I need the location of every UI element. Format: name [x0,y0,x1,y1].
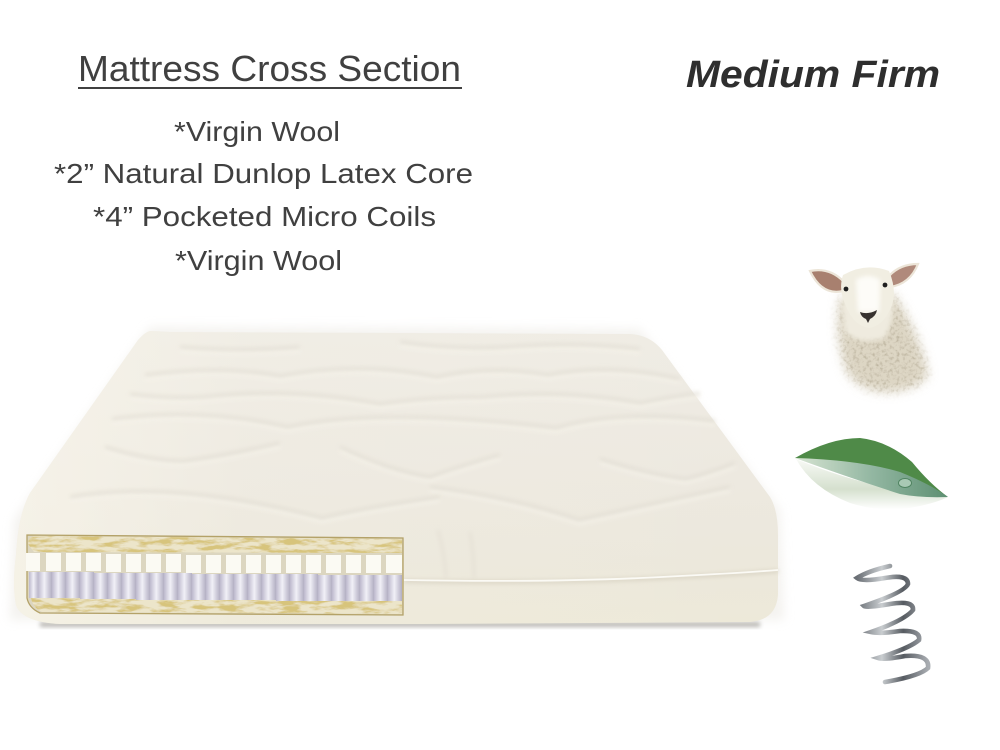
pocketed coils [29,572,402,601]
leaf underside [796,459,948,509]
leaf fold band [795,458,948,497]
cutaway background [27,535,403,615]
sheep fleece [838,293,928,392]
layer list: *4” Pocketed Micro Coils [93,201,436,232]
layer list [54,116,473,276]
leaf top [795,438,948,497]
heading: firmness: Medium Firm [686,54,940,96]
latex core blocks [26,553,402,573]
sheep blaze [856,276,880,312]
zipper seam [404,570,778,582]
layer list: *2” Natural Dunlop Latex Core [54,158,473,189]
fabric wrinkles [438,530,474,578]
mattress body [14,331,778,624]
sheep eyes [844,287,848,291]
water drop [898,478,912,488]
layer list: *Virgin Wool [174,116,340,147]
mattress left light [14,331,778,624]
quilting highlights [70,345,735,523]
mattress halo [10,327,784,620]
quilting seams [70,342,735,520]
sheep neck light [842,295,893,341]
sheep ears [810,270,844,292]
title: Mattress Cross Section [78,48,461,89]
sheep head [841,267,894,328]
icon: leaf [795,438,948,509]
bottom wool layer [31,598,402,614]
icon: sheep [810,264,928,392]
mattress shadow [40,622,760,627]
cross section cutaway [26,535,403,615]
mattress illustration [10,327,784,627]
layer list: *Virgin Wool [175,245,342,276]
sheep nose [860,310,877,323]
top wool layer [28,536,402,553]
icon: spring [857,566,928,682]
